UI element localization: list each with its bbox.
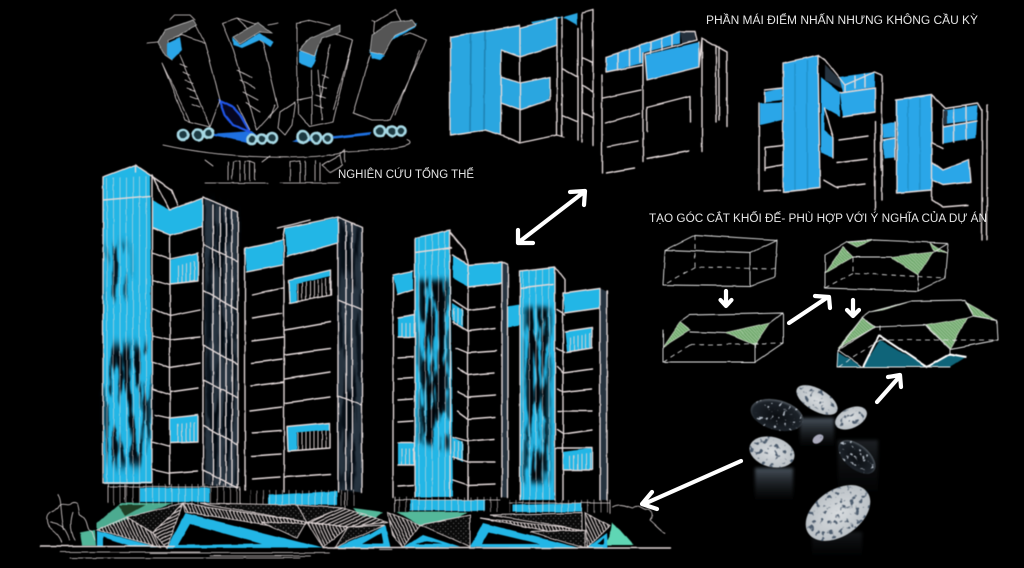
arrow: diamonds to podium	[642, 461, 741, 509]
sketch tower B	[222, 18, 278, 130]
arrow: diamonds to gem form	[877, 375, 901, 402]
outline lines	[103, 165, 203, 485]
arrow: step two to step three	[789, 296, 830, 323]
dark diamonds	[747, 394, 882, 480]
tower blue facade	[103, 165, 152, 484]
diamond reflections	[755, 418, 878, 560]
panel: massing step four, cut gem form	[837, 300, 998, 367]
icon: site trees	[178, 126, 406, 144]
panel: roof study sketch one	[450, 10, 593, 145]
panel: faceted podium base	[40, 495, 670, 558]
panel: roof study sketch four	[881, 95, 987, 240]
side facade	[205, 197, 238, 488]
ground lines	[40, 546, 670, 558]
panel: overall site study sketch with four towers	[147, 10, 427, 183]
sketch tower C	[297, 20, 353, 127]
panel: main perspective, tower three	[393, 230, 520, 500]
panel: massing step one, plain box	[663, 235, 777, 286]
heading: PHẦN MÁI ĐIỂM NHẤN NHƯNG KHÔNG CẦU KỲ: PHẦN MÁI ĐIỂM NHẤN NHƯNG KHÔNG CẦU KỲ	[706, 14, 978, 27]
icon: site arc and plan base	[163, 97, 410, 157]
arrow: double headed between tower and roof study	[518, 191, 585, 243]
window blue	[170, 253, 198, 443]
small elevation sketches	[205, 150, 345, 183]
blue lit undercroft	[97, 513, 608, 548]
roof blue	[152, 198, 203, 235]
panel: main perspective, tower one	[103, 165, 238, 488]
heading: TẠO GÓC CẮT KHỐI ĐẾ: TẠO GÓC CẮT KHỐI ĐẾ- PHÙ HỢP VỚI Ý NGHĨA CỦA DỰ ÁN	[649, 211, 987, 225]
panel: massing step three, corner cuts	[825, 240, 948, 291]
facade dark patches	[104, 245, 152, 465]
panel: main perspective, tower four	[520, 267, 607, 500]
sketch tower A	[147, 15, 220, 127]
icon: left landscape shrubs	[47, 495, 95, 543]
panel: podium glazing strips	[108, 484, 610, 514]
arrow: down from step three	[847, 300, 859, 316]
panel: roof study sketch two	[602, 32, 727, 173]
arrow: down from step one	[720, 291, 732, 306]
heading: NGHIÊN CỨU TỔNG THỂ: NGHIÊN CỨU TỔNG THỂ	[338, 168, 474, 181]
panel: main perspective, tower two	[245, 217, 362, 493]
panel: massing step two, one cut	[663, 313, 783, 362]
icon: right landscape shrub outline	[613, 505, 665, 533]
mint landscape	[80, 503, 633, 545]
sketch tower D	[353, 10, 427, 120]
panel: roof study sketch three	[759, 55, 882, 210]
light diamonds	[746, 379, 881, 552]
mesh triangles	[97, 503, 610, 548]
image: group of diamonds with reflections	[746, 379, 882, 560]
